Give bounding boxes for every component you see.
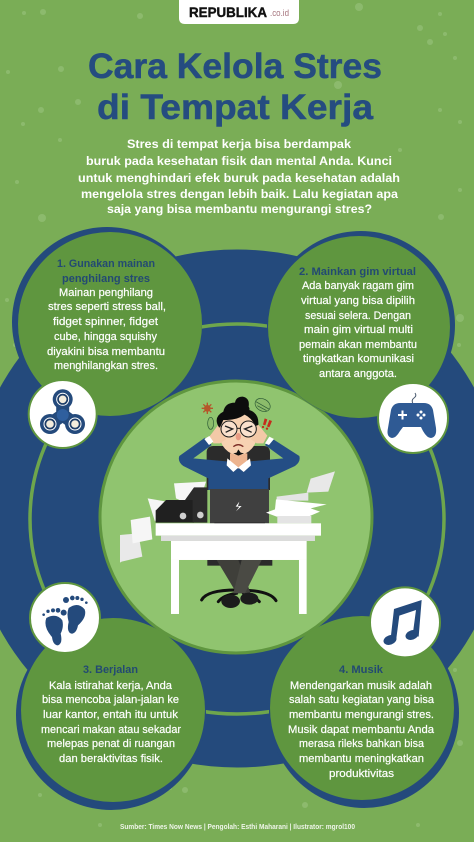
logo badge: REPUBLIKA — [189, 4, 267, 20]
heading 3: 3. Berjalan — [83, 664, 138, 676]
sweater — [179, 438, 300, 490]
icon: fidget spinner — [29, 380, 97, 448]
panel: 4 musik — [270, 616, 454, 800]
body 1 — [47, 287, 166, 372]
navy crescents behind circles — [12, 227, 459, 810]
neck — [230, 453, 247, 469]
body 2: tingkatkan komunikasi — [303, 353, 414, 365]
heading 1: penghilang stres — [62, 273, 150, 285]
intro text — [78, 137, 400, 216]
illustration: chair back and sweater figure — [179, 396, 300, 490]
intro text: saja yang bisa membantu mengurangi stres? — [107, 202, 372, 216]
paper stack right — [266, 471, 335, 523]
cuffs — [204, 436, 274, 445]
collar — [227, 458, 251, 472]
body 4: salah satu kegiatan yang bisa — [289, 694, 435, 706]
body 4: Mendengarkan musik adalah — [290, 680, 432, 692]
body 3: melepas penat di ruangan — [47, 738, 175, 750]
body 2: virtual yang bisa dipilih — [301, 295, 415, 307]
large navy ring backdrop — [0, 250, 474, 768]
icon: footprints — [30, 583, 100, 653]
body 1: diyakini bisa membantu — [47, 346, 165, 358]
body 1: fidget spinner, fidget — [53, 316, 158, 328]
thin green ring — [30, 324, 444, 714]
logo badge: .co.id — [270, 8, 289, 18]
central circle — [100, 381, 372, 653]
body 3: dan beraktivitas fisik. — [59, 753, 163, 765]
body 3: mencari makan atau sekadar — [41, 724, 181, 736]
heading 1 — [57, 258, 155, 285]
title: di Tempat Kerja — [97, 88, 374, 127]
chair seat — [207, 560, 272, 566]
panel: 1 mainan — [18, 232, 202, 416]
heading 1: 1. Gunakan mainan — [57, 258, 155, 270]
illustration: desk and office items — [120, 471, 335, 614]
heading 4: 4. Musik — [339, 664, 384, 676]
body 3: Kala istirahat kerja, Anda — [49, 680, 173, 692]
stress symbols — [202, 396, 273, 430]
body 2: Ada banyak ragam gim — [302, 280, 414, 292]
panel: 2 gim — [268, 236, 450, 418]
body 4 — [288, 680, 435, 780]
chair base — [202, 590, 276, 602]
icon: music note — [370, 587, 440, 657]
hands — [209, 423, 267, 443]
intro text: Stres di tempat kerja bisa berdampak — [127, 137, 351, 151]
body 2 — [299, 280, 417, 380]
body 4: membantu meningkatkan — [299, 753, 424, 765]
hair — [217, 397, 258, 427]
body 1: cube, hingga squishy — [54, 331, 157, 343]
legs — [217, 560, 262, 608]
nose — [236, 433, 241, 440]
glasses — [221, 421, 256, 437]
body 2: sesuai selera. Dengan — [305, 310, 411, 322]
title: Cara Kelola Stres — [88, 47, 382, 86]
printer and folder — [148, 482, 207, 523]
desk — [156, 523, 321, 614]
body 4: merasa rileks bahkan bisa — [299, 738, 425, 750]
intro text: mengelola stres dengan lebih baik. Lalu kegiatan apa — [81, 187, 398, 201]
icon: game controller — [378, 383, 448, 453]
body 3: bisa mencoba jalan-jalan ke — [42, 694, 179, 706]
logo badge — [179, 0, 299, 24]
chair back — [207, 446, 270, 490]
footer credits: Sumber: Times Now News | Pengolah: Esthi Maharani | Ilustrator: mgrol100 — [120, 822, 355, 831]
body 2: pemain akan membantu — [299, 339, 417, 351]
body 2: antara anggota. — [319, 368, 397, 380]
panel: 3 berjalan — [21, 618, 205, 802]
body 3 — [41, 680, 181, 765]
face — [219, 412, 257, 455]
eyes and mouth — [225, 426, 252, 432]
body 3: luar kantor, entah itu untuk — [43, 709, 179, 721]
body 1: Mainan penghilang — [59, 287, 153, 299]
intro text: buruk pada kesehatan fisik dan mental Anda. Kunci — [86, 154, 392, 168]
body 1: stres seperti stress ball, — [48, 301, 166, 313]
body 1: menghilangkan stres. — [54, 360, 158, 372]
heading 2: 2. Mainkan gim virtual — [299, 266, 416, 278]
laptop — [210, 489, 269, 526]
title — [88, 47, 382, 127]
body 4: Musik dapat membantu Anda — [288, 724, 435, 736]
body 4: produktivitas — [329, 768, 395, 780]
intro text: untuk menghindari efek buruk pada kesehatan adalah — [78, 171, 400, 185]
goatee — [233, 449, 244, 456]
body 2: main gim virtual multi — [304, 324, 413, 336]
body 4: membantu mengurangi stres. — [289, 709, 434, 721]
flying papers left — [120, 517, 152, 563]
